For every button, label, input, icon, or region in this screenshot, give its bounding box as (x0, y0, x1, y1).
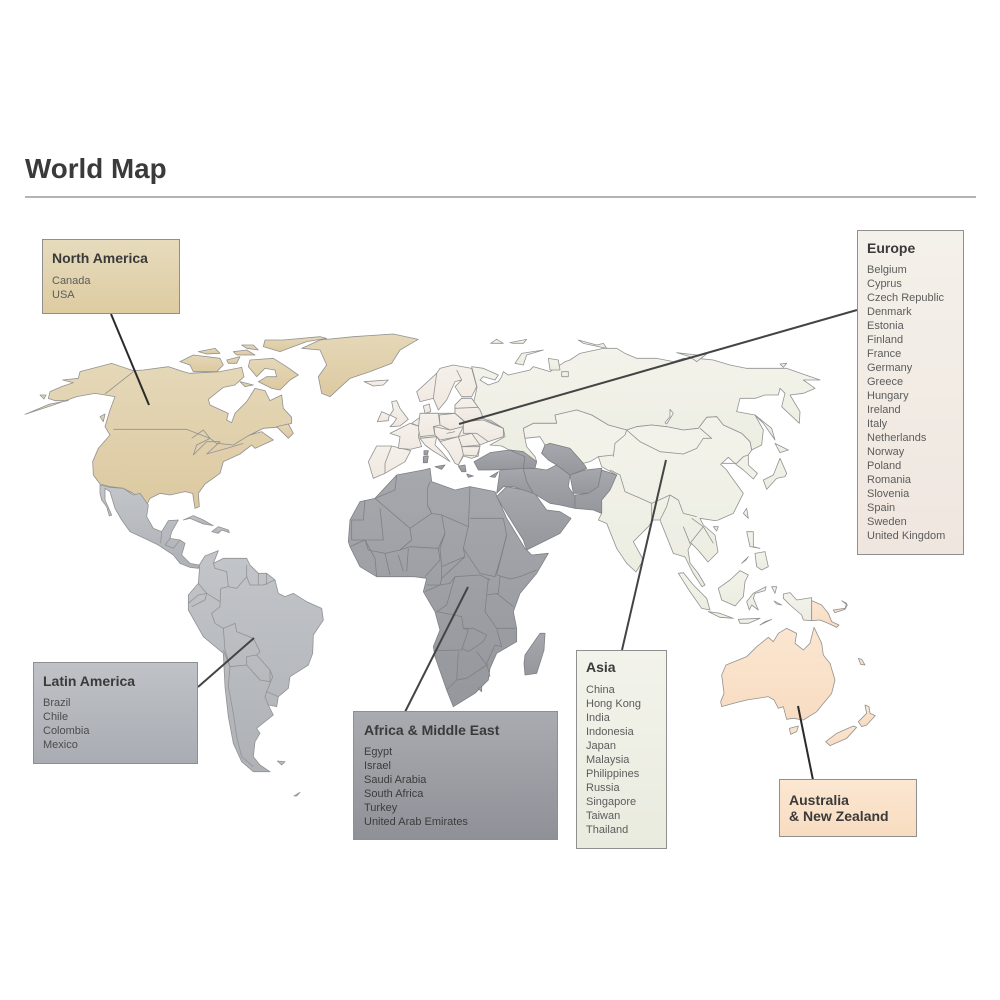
panel: Europe: Sweden (867, 516, 907, 528)
region: Asia (470, 339, 820, 587)
panel: Asia: China (586, 684, 615, 696)
panel: Europe: Cyprus (867, 278, 902, 290)
panel: Africa and Middle East (353, 711, 558, 840)
leader line: Asia (622, 460, 666, 650)
panel: Latin America: Brazil (43, 697, 71, 709)
panel: Australia and New Zealand: Australia (789, 792, 849, 808)
region: Africa (348, 468, 571, 707)
panel: North America: Canada (52, 275, 91, 287)
panel: Africa and Middle East: South Africa (364, 788, 423, 800)
panel: Australia and New Zealand (779, 779, 917, 837)
leader line: Latin America (198, 638, 254, 687)
panel: Europe: France (867, 348, 901, 360)
panel: Europe (857, 230, 964, 555)
panel: Europe: Czech Republic (867, 292, 944, 304)
panel: Europe: Hungary (867, 390, 909, 402)
panel: Africa and Middle East: Israel (364, 760, 391, 772)
panel: Africa and Middle East: Saudi Arabia (364, 774, 426, 786)
title rule (25, 196, 976, 198)
panel: Asia: Philippines (586, 768, 639, 780)
region: Australia and New Zealand (721, 601, 875, 746)
panel: Europe: United Kingdom (867, 530, 945, 542)
panel: Europe: Denmark (867, 306, 912, 318)
panel: Africa and Middle East: Africa & Middle East (364, 722, 499, 738)
panel: Latin America: Mexico (43, 739, 78, 751)
panel: Asia: Indonesia (586, 726, 634, 738)
panel: Europe: Germany (867, 362, 912, 374)
leader line: North America (111, 314, 149, 405)
panel: Asia: Asia (586, 659, 616, 675)
panel: Latin America: Chile (43, 711, 68, 723)
region: North America (25, 334, 418, 508)
region: Latin America (100, 485, 323, 796)
panel: Asia: Thailand (586, 824, 628, 836)
panel: Asia (576, 650, 667, 849)
leader line: Australia (798, 706, 813, 780)
panel: Africa and Middle East: Turkey (364, 802, 397, 814)
panel: Europe: Norway (867, 446, 904, 458)
panel: Europe: Romania (867, 474, 911, 486)
panel: Europe: Spain (867, 502, 895, 514)
panel: North America: USA (52, 289, 75, 301)
leader line: Africa and Middle East (405, 587, 468, 712)
region: Middle East (474, 443, 617, 513)
panel: North America (42, 239, 180, 314)
panel: Europe: Italy (867, 418, 887, 430)
panel: Latin America: Colombia (43, 725, 89, 737)
panel: Australia and New Zealand: & New Zealand (789, 808, 889, 824)
panel: Asia: Malaysia (586, 754, 629, 766)
panel: Europe: Europe (867, 240, 915, 256)
panel: Africa and Middle East: Egypt (364, 746, 392, 758)
panel: Europe: Ireland (867, 404, 901, 416)
panel: Asia: Russia (586, 782, 620, 794)
panel: Asia: Singapore (586, 796, 636, 808)
panel: North America: North America (52, 250, 148, 266)
panel: Europe: Belgium (867, 264, 907, 276)
panel: Latin America (33, 662, 198, 764)
panel: Europe: Finland (867, 334, 903, 346)
panel: Asia: Japan (586, 740, 616, 752)
panel: Europe: Poland (867, 460, 901, 472)
panel: Latin America: Latin America (43, 673, 135, 689)
Mediterranean islands (423, 451, 498, 477)
region: Europe (364, 365, 503, 478)
panel: Asia: Taiwan (586, 810, 620, 822)
panel: Africa and Middle East: United Arab Emirates (364, 816, 468, 828)
panel: Europe: Estonia (867, 320, 904, 332)
panel: Europe: Slovenia (867, 488, 909, 500)
panel: Europe: Greece (867, 376, 903, 388)
title: World Map (25, 153, 167, 184)
panel: Europe: Netherlands (867, 432, 926, 444)
region: Southeast Asia islands (678, 552, 812, 625)
panel: Asia: Hong Kong (586, 698, 641, 710)
leader line: Europe (459, 310, 857, 424)
panel: Asia: India (586, 712, 610, 724)
